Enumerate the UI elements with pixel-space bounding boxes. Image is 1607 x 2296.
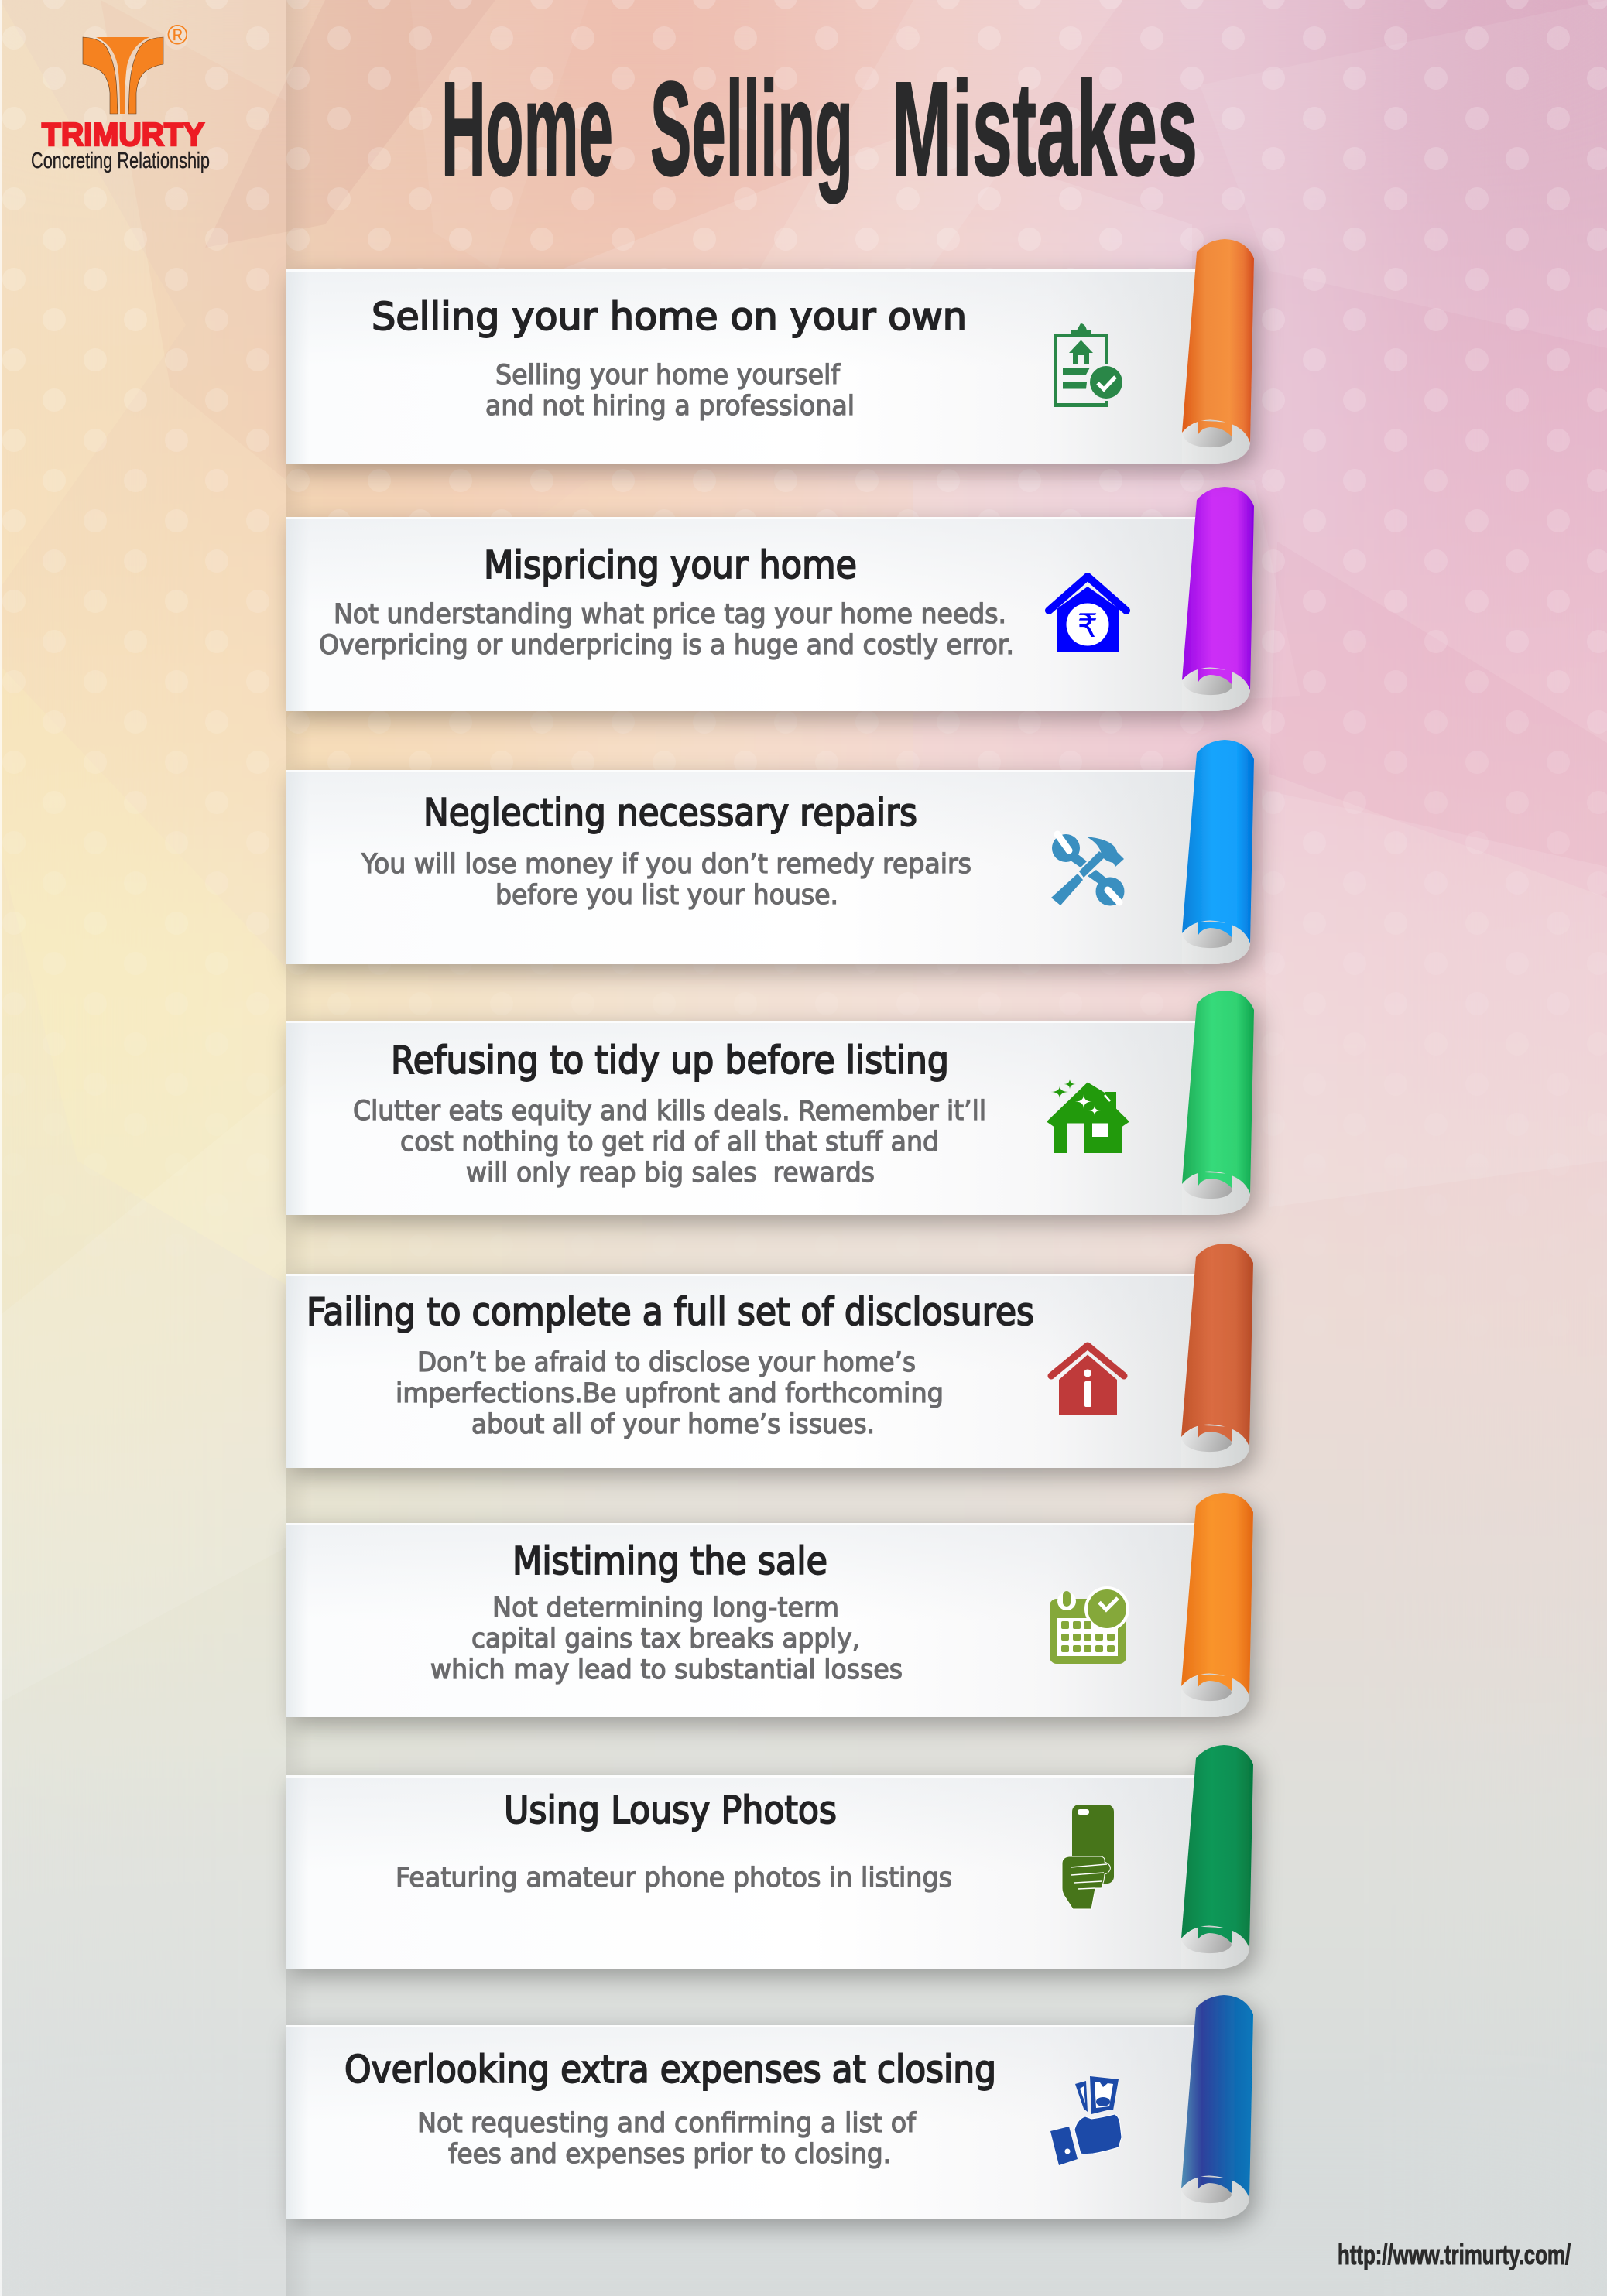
logo mark	[83, 37, 163, 114]
banner 4	[286, 991, 1254, 1215]
icon: house with info	[1051, 1346, 1124, 1415]
body 4: cost nothing to get rid of all that stuff and	[400, 1127, 939, 1158]
icon: clipboard with house and check	[1054, 323, 1122, 407]
heading 7: Using Lousy Photos	[504, 1788, 837, 1832]
body 2	[319, 599, 1014, 661]
heading 2: Mispricing your home	[484, 543, 857, 587]
banner 3	[286, 740, 1254, 964]
body 1: and not hiring a professional	[485, 391, 855, 422]
facets	[0, 0, 1607, 1702]
panel 7: Using Lousy Photos	[286, 1745, 1253, 1969]
body 4: will only reap big sales rewards	[466, 1158, 875, 1189]
body 4: Clutter eats equity and kills deals. Remember it’ll	[353, 1096, 986, 1127]
icon: wrench and hammer	[1051, 834, 1124, 905]
panel 2: Mispricing your home	[286, 487, 1254, 711]
banner 6	[286, 1493, 1253, 1717]
title: Mistakes	[892, 53, 1198, 204]
panel 1: Selling your home on your own	[286, 239, 1254, 464]
icon: house with rupee: ₹	[1078, 607, 1098, 645]
logo	[31, 19, 210, 173]
banner 8	[286, 1995, 1253, 2219]
title: Home	[441, 53, 613, 204]
title: Selling	[650, 53, 853, 204]
body 3	[361, 849, 971, 911]
body 5	[396, 1347, 944, 1440]
body 4	[353, 1096, 986, 1189]
panel 5: Failing to complete a full set of disclosures	[286, 1244, 1253, 1468]
registered mark: ®	[167, 19, 188, 50]
body 1: Selling your home yourself	[495, 360, 841, 391]
body 1	[485, 360, 855, 422]
tagline: Concreting Relationship	[31, 149, 210, 173]
body 8: Not requesting and confirming a list of	[417, 2108, 917, 2139]
body 7: Featuring amateur phone photos in listings	[396, 1863, 952, 1894]
panel 4: Refusing to tidy up before listing	[286, 991, 1254, 1215]
heading 5: Failing to complete a full set of disclosures	[307, 1290, 1034, 1334]
banner 7	[286, 1745, 1253, 1969]
body 6: capital gains tax breaks apply,	[471, 1624, 860, 1654]
icon: sparkling clean house	[1047, 1079, 1129, 1153]
body 2: Overpricing or underpricing is a huge and costly error.	[319, 630, 1014, 661]
body 5: about all of your home’s issues.	[471, 1409, 875, 1440]
body 3: before you list your house.	[495, 880, 838, 911]
brand name: TRIMURTY	[42, 116, 204, 152]
body 5: Don’t be afraid to disclose your home’s	[417, 1347, 916, 1378]
icon: hand holding phone	[1062, 1805, 1114, 1909]
body 3: You will lose money if you don’t remedy repairs	[361, 849, 971, 880]
body 5: imperfections.Be upfront and forthcoming	[396, 1378, 944, 1409]
body 6: Not determining long-term	[492, 1593, 839, 1624]
banner 5	[286, 1244, 1253, 1468]
panel 6: Mistiming the sale	[286, 1493, 1253, 1717]
body 8	[417, 2108, 917, 2170]
heading 8: Overlooking extra expenses at closing	[344, 2048, 996, 2092]
left band	[2, 0, 286, 2296]
body 6: which may lead to substantial losses	[430, 1654, 903, 1685]
dot pattern	[2, 0, 1607, 734]
banner 2	[286, 487, 1254, 711]
heading 1: Selling your home on your own	[372, 295, 967, 339]
heading 3: Neglecting necessary repairs	[423, 791, 917, 835]
panel 3: Neglecting necessary repairs	[286, 740, 1254, 964]
body 2: Not understanding what price tag your home needs.	[334, 599, 1006, 630]
banner 1	[286, 239, 1254, 464]
heading 6: Mistiming the sale	[512, 1539, 827, 1583]
heading 4: Refusing to tidy up before listing	[391, 1039, 949, 1083]
icon: house with rupee	[1049, 577, 1126, 652]
icon: calendar with clock	[1050, 1586, 1129, 1664]
body 8: fees and expenses prior to closing.	[448, 2139, 891, 2170]
body 6	[430, 1593, 903, 1685]
icon: hand with money	[1050, 2076, 1122, 2165]
panel 8: Overlooking extra expenses at closing	[286, 1995, 1253, 2219]
